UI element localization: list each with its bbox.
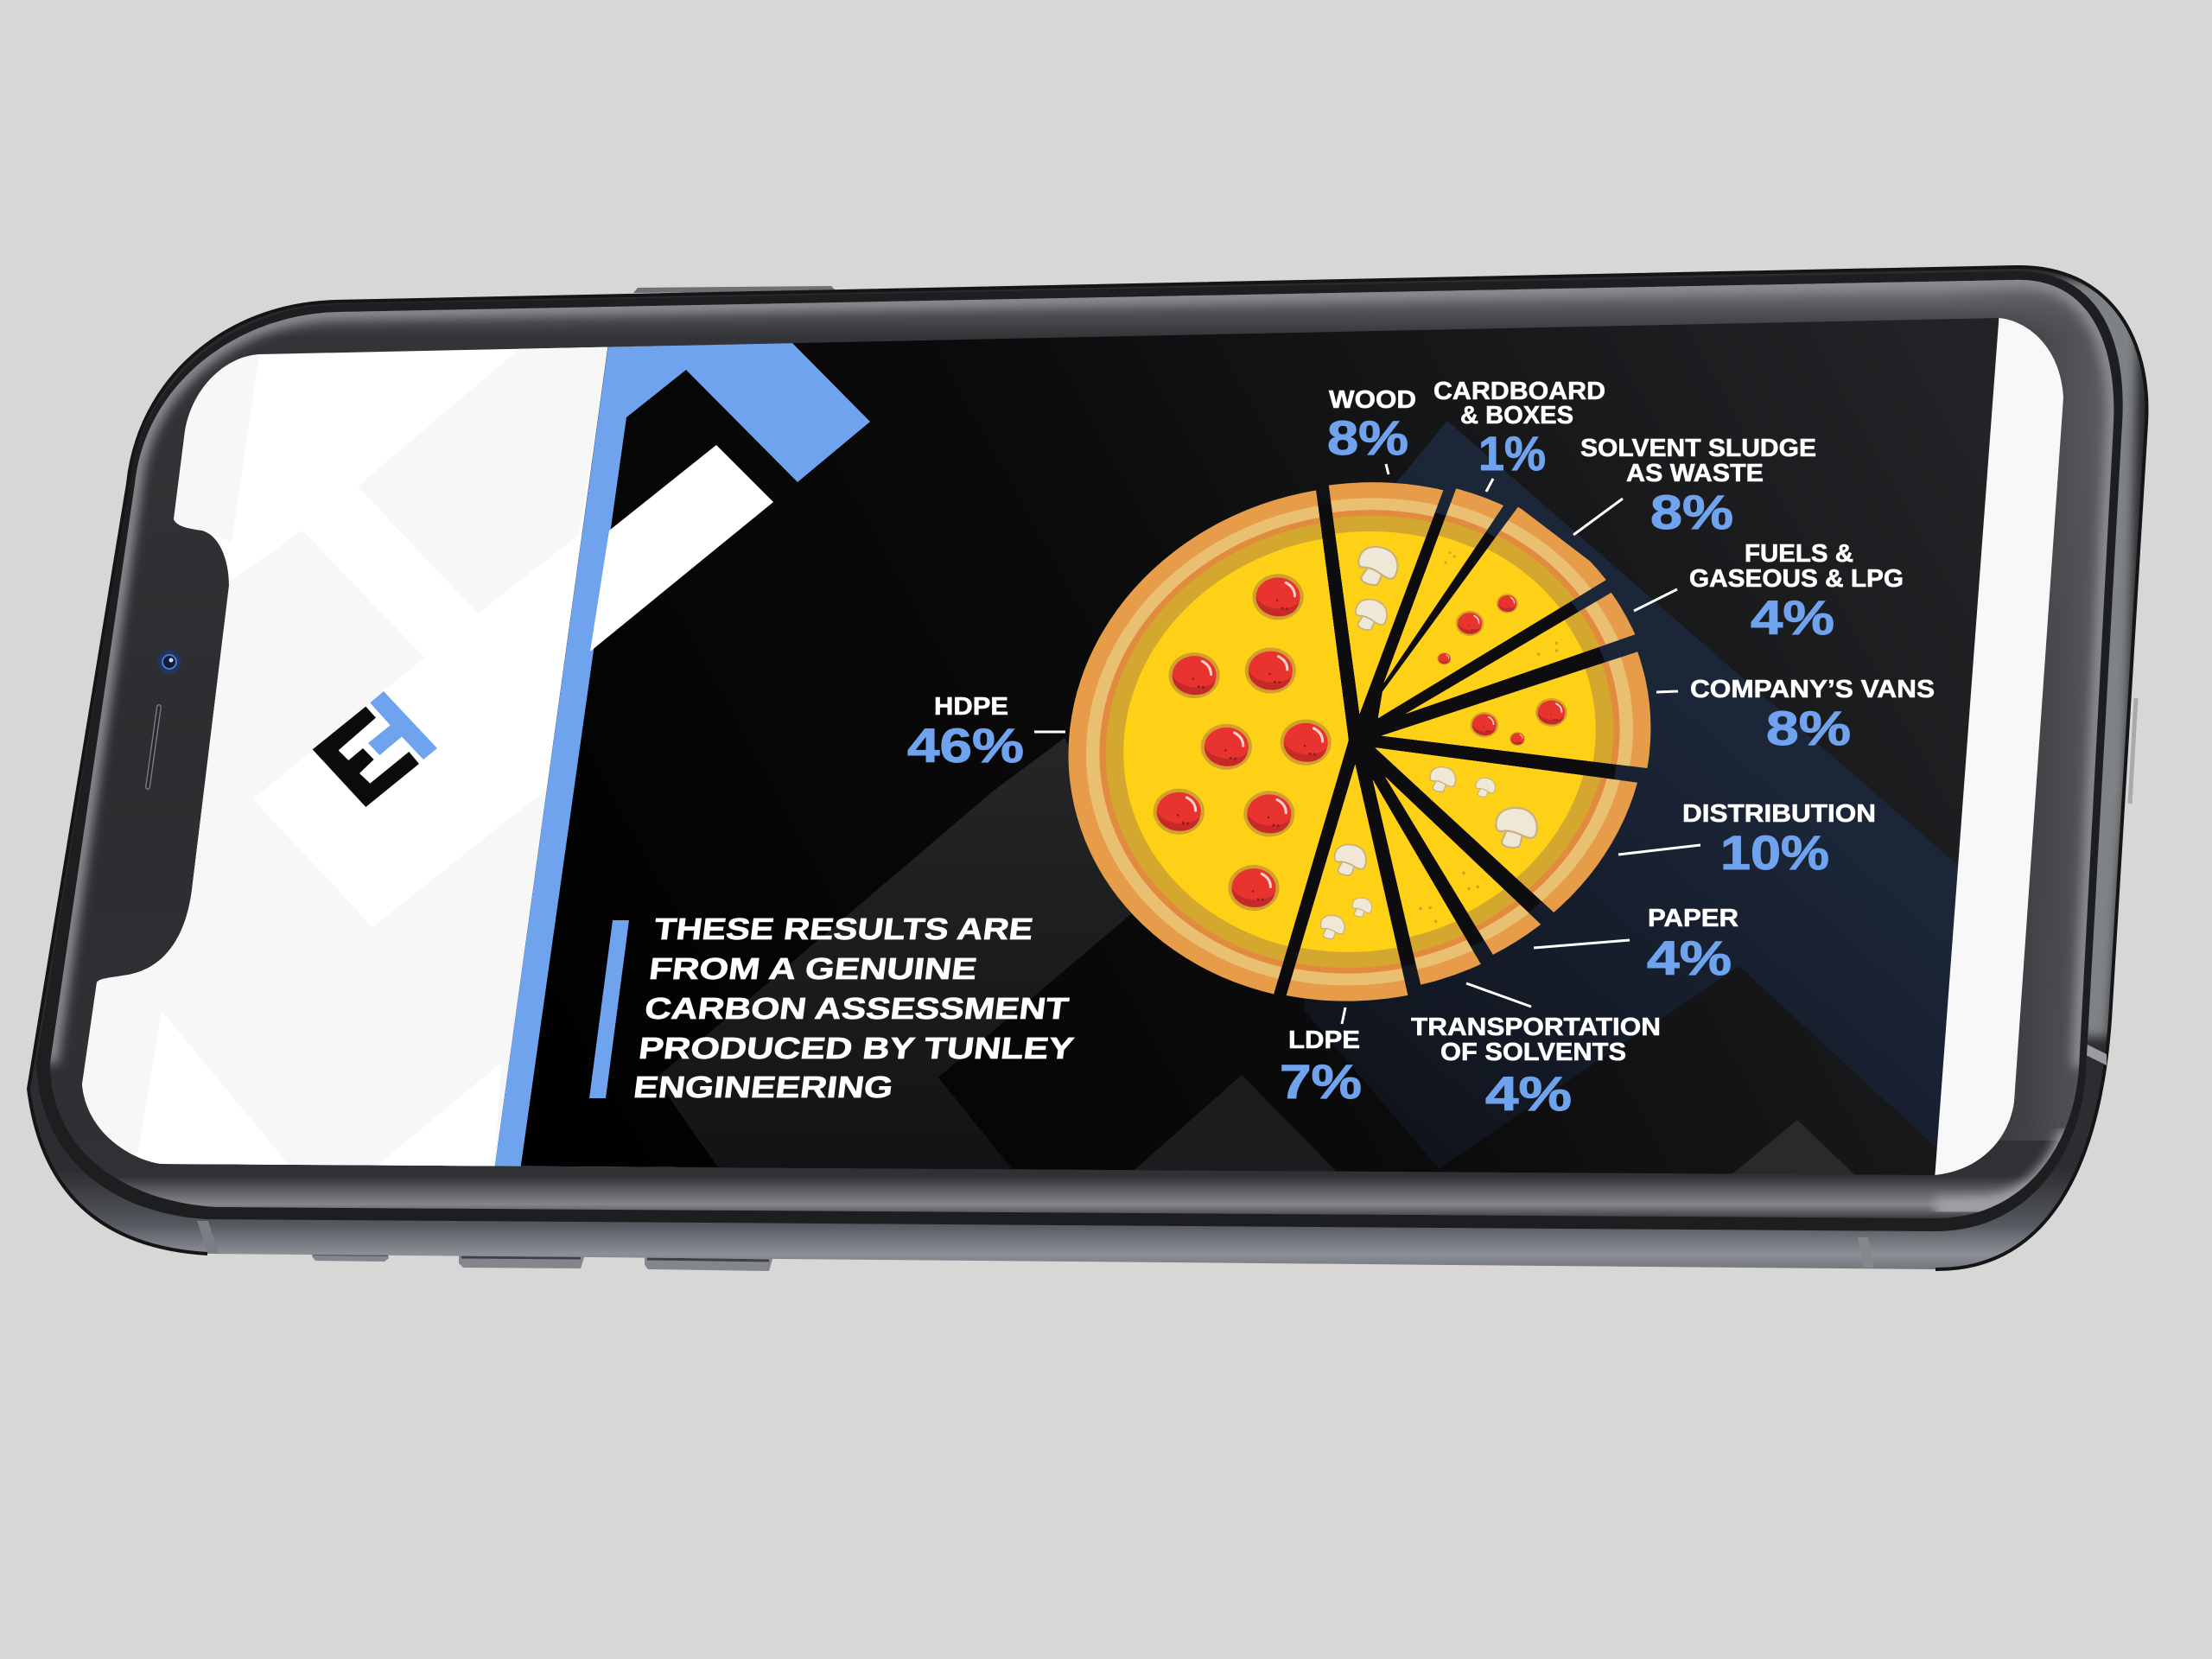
phone outer outline (29, 267, 2146, 1269)
speaker (148, 707, 159, 787)
seam: bottom left (197, 1221, 219, 1254)
seam: right (2081, 1041, 2107, 1065)
label: paper: 4% (1647, 931, 1732, 985)
label: company's vans: 8% (1766, 701, 1851, 755)
label: wood: WOOD (1329, 386, 1416, 414)
label: transportation of solvents: TRANSPORTATION (1411, 1014, 1661, 1041)
slice: company's vans 8% (1382, 652, 1650, 769)
text block: results statement: FROM A GENUINE (647, 952, 979, 986)
slice: fuels 4% (1406, 593, 1635, 714)
label: distribution: DISTRIBUTION (1682, 800, 1876, 828)
panel: dark chart side (494, 311, 2005, 1179)
phone outer frame (29, 267, 2146, 1269)
slice: cardboard 1% (1384, 488, 1503, 683)
label: wood: 8% (1327, 410, 1408, 465)
label: paper: PAPER (1648, 905, 1738, 932)
pizza gap backdrop (1098, 502, 1618, 969)
background chevron: navy band (1296, 421, 1961, 1168)
label: HDPE: 46% (907, 718, 1024, 772)
label: fuels and gaseous and LPG: FUELS & (1745, 540, 1853, 568)
silver edge on right side (2039, 281, 2139, 1037)
pizza pie chart (1066, 462, 1655, 1013)
label: cardboard and boxes: CARDBOARD (1433, 378, 1605, 405)
label: distribution: 10% (1720, 825, 1829, 880)
background chevron: grey right (1729, 1120, 1857, 1177)
label: HDPE: HDPE (934, 693, 1008, 721)
label: LDPE: 7% (1280, 1054, 1362, 1109)
label: transportation of solvents: OF SOLVENTS (1440, 1039, 1626, 1066)
right white strip (1935, 311, 2074, 1179)
white corner stripe (590, 445, 773, 652)
phone front edge line (36, 271, 2123, 1231)
bezel right glow (1999, 289, 2113, 1141)
text block: results statement: ENGINEERING (632, 1071, 895, 1104)
label: company's vans (1656, 676, 1935, 755)
label: paper (1534, 905, 1738, 985)
text block: results statement: CARBON ASSESSMENT (643, 992, 1071, 1026)
label: cardboard and boxes (1433, 378, 1605, 492)
label: LDPE: LDPE (1288, 1027, 1360, 1054)
bottom button: volume up (459, 1248, 584, 1268)
label: fuels and gaseous and LPG (1634, 540, 1904, 645)
label: fuels and gaseous and LPG: 4% (1751, 590, 1834, 645)
text block: results statement: THESE RESULTS ARE (652, 912, 1035, 946)
slice: paper 4% (1066, 463, 1646, 1001)
right side button (2130, 698, 2136, 804)
camera (157, 650, 181, 674)
accent bar (589, 920, 629, 1098)
label: solvent sludge as waste (1573, 435, 1816, 539)
bottom button: volume down (645, 1249, 772, 1271)
label: transportation of solvents: 4% (1485, 1066, 1572, 1121)
phone body (29, 267, 2146, 1271)
phone front bezel (50, 280, 2113, 1218)
panel: white logo side (69, 311, 674, 1184)
blue corner shape and band (494, 339, 870, 1171)
slice: solvent sludge 8% (1377, 506, 1606, 718)
bezel edge sheen (50, 280, 2113, 1208)
background chevron: grey middle (1128, 1075, 1340, 1175)
slice: distribution 10% (1376, 747, 1637, 912)
label: transportation of solvents (1411, 983, 1661, 1121)
background chevron: grey left (656, 738, 1149, 1175)
top side button (633, 286, 836, 293)
seam: bottom right (1858, 1237, 1873, 1268)
label: solvent sludge as waste: SOLVENT SLUDGE (1580, 435, 1816, 462)
text block: results statement: PRODUCED BY TUNLEY (637, 1032, 1076, 1065)
slice: HDPE 46% (1068, 491, 1349, 994)
slice: LDPE 7% (1068, 474, 1648, 1012)
label: solvent sludge as waste: 8% (1650, 485, 1733, 539)
slice: transportation of solvents 4% (1067, 467, 1647, 1004)
label: wood (1327, 386, 1416, 474)
logo: ET mark (313, 691, 437, 807)
text block: results statement (632, 912, 1076, 1104)
label: HDPE (907, 693, 1065, 772)
label: cardboard and boxes: 1% (1478, 426, 1546, 480)
phone screen (69, 311, 2074, 1184)
label: cardboard and boxes: & BOXES (1460, 402, 1573, 429)
label: fuels and gaseous and LPG: GASEOUS & LPG (1689, 565, 1904, 593)
label: solvent sludge as waste: AS WASTE (1626, 460, 1764, 487)
slice: wood 8% (1329, 482, 1443, 714)
label: company's vans: COMPANY’S VANS (1690, 676, 1935, 703)
label: LDPE (1280, 1007, 1362, 1109)
bottom button: mute switch (312, 1245, 389, 1262)
label: distribution (1618, 800, 1876, 880)
